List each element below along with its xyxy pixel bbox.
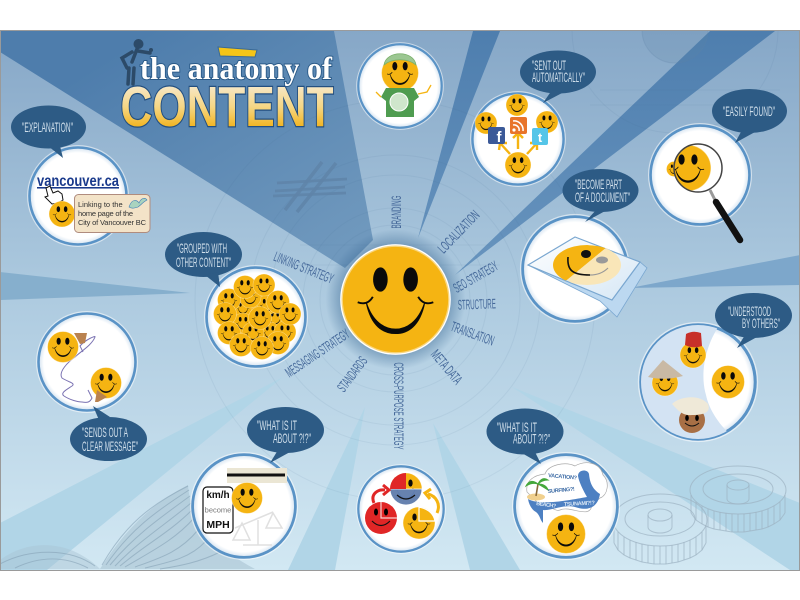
skeleton figure [122,39,153,84]
yellow bar [218,47,257,57]
yellow smiley [403,507,435,539]
icon: cups [74,333,107,402]
speech bubble [11,106,86,158]
main smiley [712,366,744,398]
speech bubble [562,169,638,222]
panel: become part of a document [520,169,647,324]
smileys [475,94,558,178]
icon: Twitter: t [538,130,543,145]
conversion box [203,487,233,533]
spoke labels: MESSAGING STRATEGY [282,325,353,380]
icon: RSS [510,117,527,134]
link text: vancouver.ca [37,173,119,190]
background open book [0,485,255,569]
thought cloud [527,463,607,512]
speech bubble: "SENT OUT [532,57,566,73]
open book [528,237,647,317]
icon: scales [233,512,282,545]
ruler [227,468,287,483]
panel: units km/h become MPH [190,407,324,560]
string [61,337,95,402]
smiley top [48,332,78,362]
red smiley [365,502,397,534]
spoke labels: STANDARDS [334,353,370,395]
blue and red smiley [390,473,422,505]
title [120,39,334,139]
speech bubble: "BECOME PART [575,176,622,192]
speech bubble [486,408,564,464]
speech bubble [165,232,242,287]
thought words: SURFING?! [548,487,575,495]
thought words: BEACH? [536,501,557,510]
spoke labels: META DATA [428,346,466,388]
infographic canvas: STRUCTURE [458,295,496,313]
icon: magnifying glass [674,144,740,240]
background gear top [642,31,708,64]
fez smiley [680,332,706,368]
infographic canvas: SEO STRATEGY [450,257,501,296]
speech bubble [70,406,147,461]
panel: sends out a clear message [36,311,147,461]
smiley cluster [214,274,301,360]
speech bubble: CLEAR MESSAGE" [82,438,138,454]
spoke labels: LINKING STRATEGY [272,248,336,287]
infographic canvas: CROSS-PURPOSE STRATEGY [391,362,407,450]
thought words [536,473,596,510]
spoke labels: LOCALIZATION [434,207,483,256]
icon: hand cursor [45,186,63,204]
panel: what is it about beach [486,408,620,560]
speech bubble [247,407,324,463]
speech bubble [715,293,792,348]
panel: cross-purpose strategy [356,464,446,554]
central smiley [326,230,466,370]
panel: sent out automatically [470,50,596,187]
panel: easily found [648,89,787,240]
magnified smiley [674,146,711,191]
speech bubble: "WHAT IS IT [497,419,537,435]
speech bubble: OTHER CONTENT" [176,254,231,270]
speech bubble: ABOUT ?!?" [273,430,311,446]
panel: explanation [11,106,150,247]
tooltip: home page of the [78,209,133,218]
smiley [546,514,586,554]
speech bubble: "WHAT IS IT [257,417,297,433]
tooltip: Linking to the [78,200,123,209]
pale backdrop [641,325,727,439]
smiley bottom [90,368,122,398]
panel: branding [356,42,444,130]
smiley [49,201,75,227]
green t-shirt [376,85,431,117]
background gears bottom right [613,466,786,564]
speech bubble: "SENDS OUT A [82,424,128,440]
smiley [232,482,262,514]
smiley [382,54,418,92]
spoke labels [272,196,501,450]
panel: understood by others [638,293,792,450]
heading line 2: CONTENT [120,75,334,139]
small smiley [666,162,682,176]
thought words: VACATION? [548,473,578,482]
conversion box: km/h [206,490,230,501]
speech bubble: AUTOMATICALLY" [532,69,585,85]
half smiley [553,245,621,285]
tooltip [74,194,150,232]
speech bubble [520,50,596,103]
palm tree [526,479,548,500]
conversion box: MPH [206,519,230,531]
icon: orange arrow [425,489,438,513]
icon: Facebook: f [496,129,502,146]
speech bubble: OF A DOCUMENT" [575,189,630,205]
icon: red arrow [373,485,389,503]
conical hat smiley [648,360,683,396]
heading line 1: the anatomy of [140,50,332,86]
conversion box: become [205,506,231,514]
panel: grouped with other content [165,232,308,369]
spoke labels: TRANSLATION [449,318,497,349]
turban smiley [672,397,709,433]
infographic canvas: BRANDING [388,196,404,228]
speech bubble: "GROUPED WITH [177,240,227,256]
speech bubble [712,89,787,143]
tooltip: City of Vancouver BC [78,218,147,227]
icon: arrows [499,133,537,154]
hash mark decoration [273,162,347,212]
thought words: TSUNAMI?!? [564,500,596,508]
wave [528,470,600,523]
green recycled cap [384,54,416,65]
speech bubble: ABOUT ?!?" [513,430,550,446]
speech bubble: "EXPLANATION" [22,119,73,135]
